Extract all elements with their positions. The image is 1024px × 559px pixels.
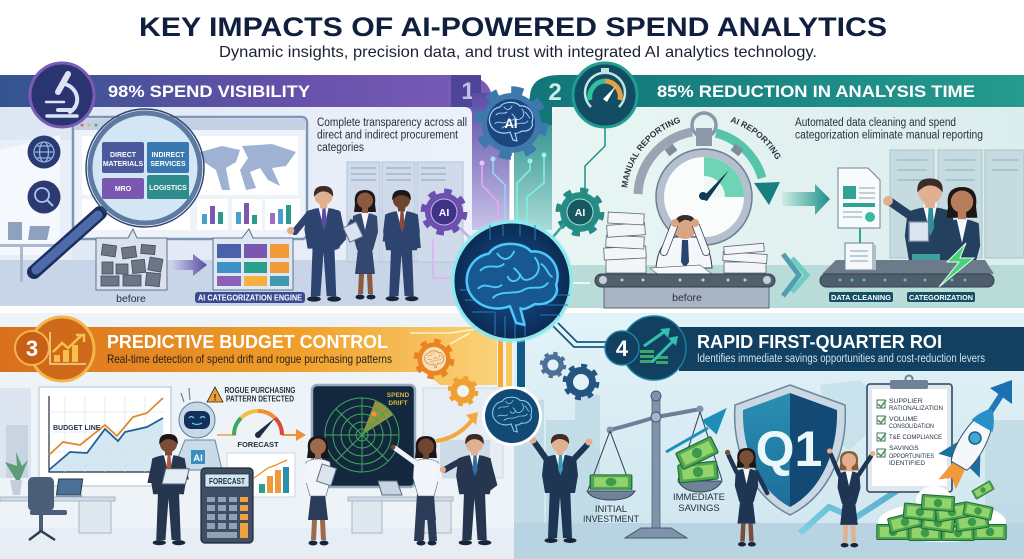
traces <box>410 327 490 344</box>
stopwatch: MANUAL REPORTING <box>622 118 680 188</box>
circuit traces <box>431 152 546 278</box>
smoke cloud <box>878 486 1006 542</box>
title: KEY IMPACTS OF AI-POWERED SPEND ANALYTICS <box>139 12 887 42</box>
lightning <box>939 243 974 287</box>
rogue purchasing alert: PATTERN DETECTED <box>226 394 294 404</box>
magnifying glass <box>34 109 204 272</box>
clipboard checklist: OPPORTUNITIES <box>889 453 934 460</box>
analyst <box>303 436 336 546</box>
icon: AI gear <box>424 192 464 232</box>
description <box>317 117 467 154</box>
analyst with tablet <box>150 434 189 545</box>
plant <box>5 452 28 495</box>
radar board <box>312 385 415 487</box>
analyst <box>946 187 980 260</box>
category card: indirect services: INDIRECT <box>151 152 185 159</box>
small forecast chart <box>227 453 295 497</box>
window <box>0 388 31 478</box>
cheering manager <box>530 434 592 543</box>
center column: purple <box>472 93 512 230</box>
after: sorted tiles <box>213 229 293 290</box>
immediate savings label: SAVINGS <box>678 503 720 514</box>
central AI brain <box>450 219 574 343</box>
icon: AI gear: AI <box>575 207 585 219</box>
number 4 <box>605 316 686 380</box>
description: categories <box>317 142 364 154</box>
icon: gear <box>450 378 476 404</box>
subtitle: Dynamic insights, precision data, and trust with integrated AI analytics technology. <box>219 44 817 61</box>
robot: AI <box>193 453 203 464</box>
icon: search <box>28 180 60 214</box>
robot <box>173 388 222 470</box>
right desk <box>348 497 453 533</box>
cash: initial investment <box>590 475 632 489</box>
radar board: DRIFT <box>388 400 408 407</box>
analyst presenting <box>883 178 954 260</box>
category card: logistics: LOGISTICS <box>149 185 187 192</box>
clipboard checklist: RATIONALIZATION <box>889 405 943 412</box>
server racks <box>347 162 463 262</box>
icon: coins and arrows <box>640 328 678 364</box>
subheading: Real-time detection of spend drift and rogue purchasing patterns <box>107 352 392 366</box>
icon: central AI gear <box>479 91 543 155</box>
number 3: 3 <box>26 336 38 361</box>
category card: indirect services: SERVICES <box>150 161 186 168</box>
clipboard checklist: SUPPLIER <box>889 398 923 405</box>
before: unsorted tiles <box>96 229 167 290</box>
description <box>795 117 983 142</box>
chair <box>28 477 67 540</box>
radar board: SPEND <box>387 392 409 399</box>
manual reporting arc <box>638 132 692 194</box>
orange arrow <box>436 420 472 441</box>
world map <box>200 144 296 190</box>
report document <box>838 168 880 228</box>
laptop <box>378 481 402 495</box>
document box on belt <box>845 243 876 270</box>
cheering analyst <box>725 448 767 547</box>
laptop <box>56 479 83 497</box>
category card: MRO: MRO <box>115 186 132 193</box>
category card: direct materials: DIRECT <box>110 152 137 159</box>
category card: MRO <box>102 178 144 199</box>
description: Automated data cleaning and spend <box>795 117 956 129</box>
clipboard checklist: IDENTIFIED <box>889 460 925 467</box>
clipboard checklist: CONSOLIDATION <box>889 423 934 430</box>
clipboard checklist: SAVINGS <box>889 445 919 452</box>
conveyor belt <box>820 260 994 287</box>
initial investment label: INVESTMENT <box>583 514 639 525</box>
data cleaning label: DATA CLEANING <box>831 293 891 302</box>
calculator <box>201 468 253 543</box>
icon: AI gear: AI <box>439 207 449 219</box>
dashboard screen <box>73 117 307 239</box>
categorization label: CATEGORIZATION <box>909 293 973 302</box>
panel: predictive budget control <box>0 313 514 559</box>
budget line chart <box>39 387 171 486</box>
small brain badge <box>482 386 542 446</box>
heading: RAPID FIRST-QUARTER ROI <box>697 332 942 352</box>
category card: indirect services <box>147 142 189 173</box>
AI reporting arc <box>716 133 762 178</box>
icon: stopwatch gauge <box>573 63 637 127</box>
paper stack right <box>723 243 767 273</box>
description: direct and indirect procurement <box>317 130 459 142</box>
initial investment label: INITIAL <box>595 504 627 515</box>
clipboard checklist: VOLUME <box>889 416 918 423</box>
heading: 85% REDUCTION IN ANALYSIS TIME <box>657 82 975 101</box>
gears <box>542 354 597 398</box>
blue arrow <box>666 411 724 452</box>
loose papers <box>650 265 712 276</box>
description: Complete transparency across all <box>317 117 467 129</box>
map backdrop <box>820 380 880 450</box>
Q1 shield: Q1 <box>756 421 822 477</box>
number 2: 2 <box>548 79 562 106</box>
colleague with tablet <box>343 190 378 300</box>
presenter <box>287 186 343 302</box>
window right <box>423 388 503 478</box>
arrow <box>173 254 207 276</box>
icon: brain gear <box>416 341 452 377</box>
icon: central AI gear: AI <box>504 116 518 131</box>
icon: AI gear <box>559 191 601 233</box>
warning triangle: ! <box>214 392 216 402</box>
chevrons <box>783 254 807 296</box>
icon: microscope <box>30 63 94 127</box>
heading: 98% SPEND VISIBILITY <box>108 82 311 101</box>
growth arrow <box>800 380 1012 533</box>
initial investment label <box>583 504 639 525</box>
server racks <box>890 150 1024 258</box>
forecast gauge: FORECAST <box>237 440 279 449</box>
stopwatch body <box>692 113 716 137</box>
manager <box>440 434 494 545</box>
cash: immediate savings <box>676 436 718 483</box>
category card: logistics <box>147 175 189 199</box>
rocket <box>927 397 1013 497</box>
calculator: FORECAST <box>209 476 246 486</box>
conveyor desk <box>595 274 775 308</box>
category card: direct materials <box>102 142 144 173</box>
rogue purchasing alert: ROGUE PURCHASING <box>224 386 296 395</box>
arrow <box>782 184 830 215</box>
icon: globe <box>28 136 60 168</box>
number 3 <box>15 331 49 365</box>
connector <box>585 128 605 192</box>
category card: direct materials: MATERIALS <box>103 161 143 168</box>
cheering analyst <box>827 448 875 547</box>
skyline <box>514 395 1024 523</box>
traces <box>553 323 625 347</box>
panel: spend visibility <box>0 63 512 306</box>
Q1 shield <box>735 385 845 515</box>
stopwatch: AI REPORTING <box>730 117 780 160</box>
stressed analyst <box>656 215 712 268</box>
clipboard checklist <box>867 376 952 492</box>
before label: before <box>116 293 146 305</box>
icon: growth chart <box>30 317 94 381</box>
warning triangle <box>207 387 223 402</box>
money pile <box>877 481 1006 540</box>
paper stack left <box>604 212 646 273</box>
document box <box>845 243 876 270</box>
number 1: 1 <box>461 78 475 105</box>
immediate savings label: IMMEDIATE <box>673 492 725 503</box>
forecast gauge <box>217 411 306 449</box>
before label: before <box>672 292 702 304</box>
rogue purchasing alert <box>224 386 296 404</box>
immediate savings label <box>673 492 725 514</box>
colleague with tablet <box>383 190 420 301</box>
center column: teal <box>514 93 552 230</box>
clipboard checklist: T&E COMPLIANCE <box>889 434 942 441</box>
heading: PREDICTIVE BUDGET CONTROL <box>107 332 388 352</box>
analyst pointing <box>390 436 441 546</box>
budget line chart: BUDGET LINE <box>53 425 101 432</box>
panel: analysis time <box>530 62 1024 308</box>
number 4: 4 <box>616 336 629 361</box>
stopwatch <box>622 111 780 246</box>
balance scale <box>587 391 722 538</box>
left desk <box>0 497 115 533</box>
bar charts <box>202 203 291 224</box>
panel: first-quarter ROI <box>514 313 1024 559</box>
AI categorization engine label: AI CATEGORIZATION ENGINE <box>198 294 303 302</box>
description: categorization eliminate manual reporting <box>795 130 983 142</box>
